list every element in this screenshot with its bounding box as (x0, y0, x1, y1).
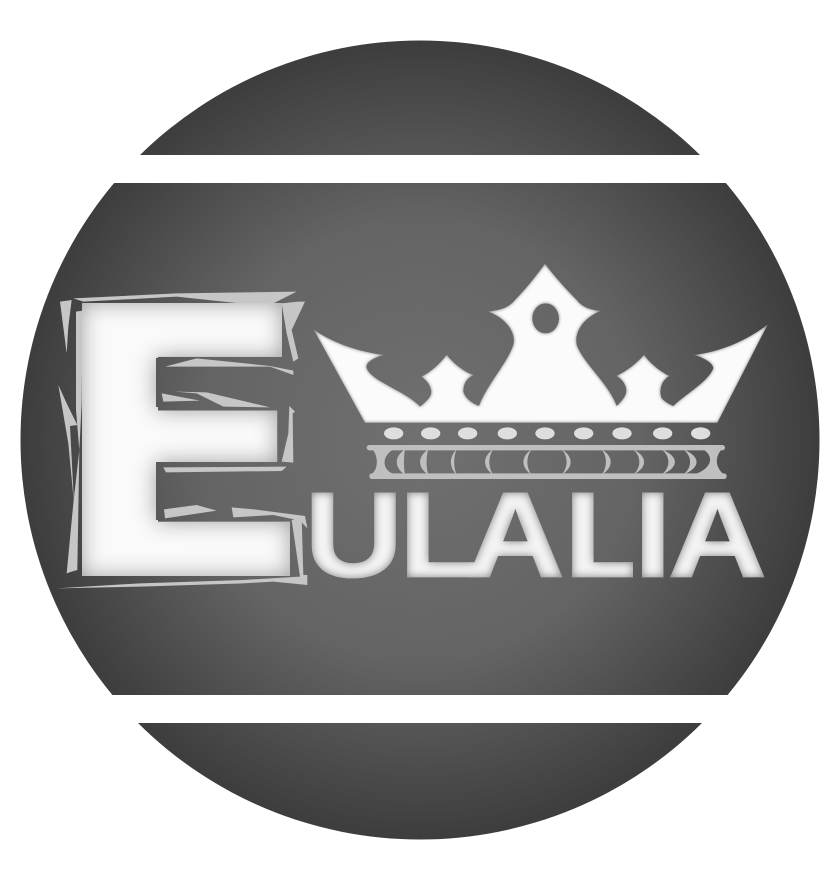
top white band (0, 155, 840, 183)
sketch frame around the E (57, 292, 307, 588)
large letter E (82, 303, 290, 576)
crown body (314, 264, 767, 423)
crown jewels row (384, 427, 710, 439)
bottom white band (0, 695, 840, 723)
large letter E: E (65, 227, 303, 651)
crown icon (314, 264, 767, 479)
wordmark ULALIA: ULALIA (304, 468, 767, 603)
crown band (367, 445, 727, 479)
